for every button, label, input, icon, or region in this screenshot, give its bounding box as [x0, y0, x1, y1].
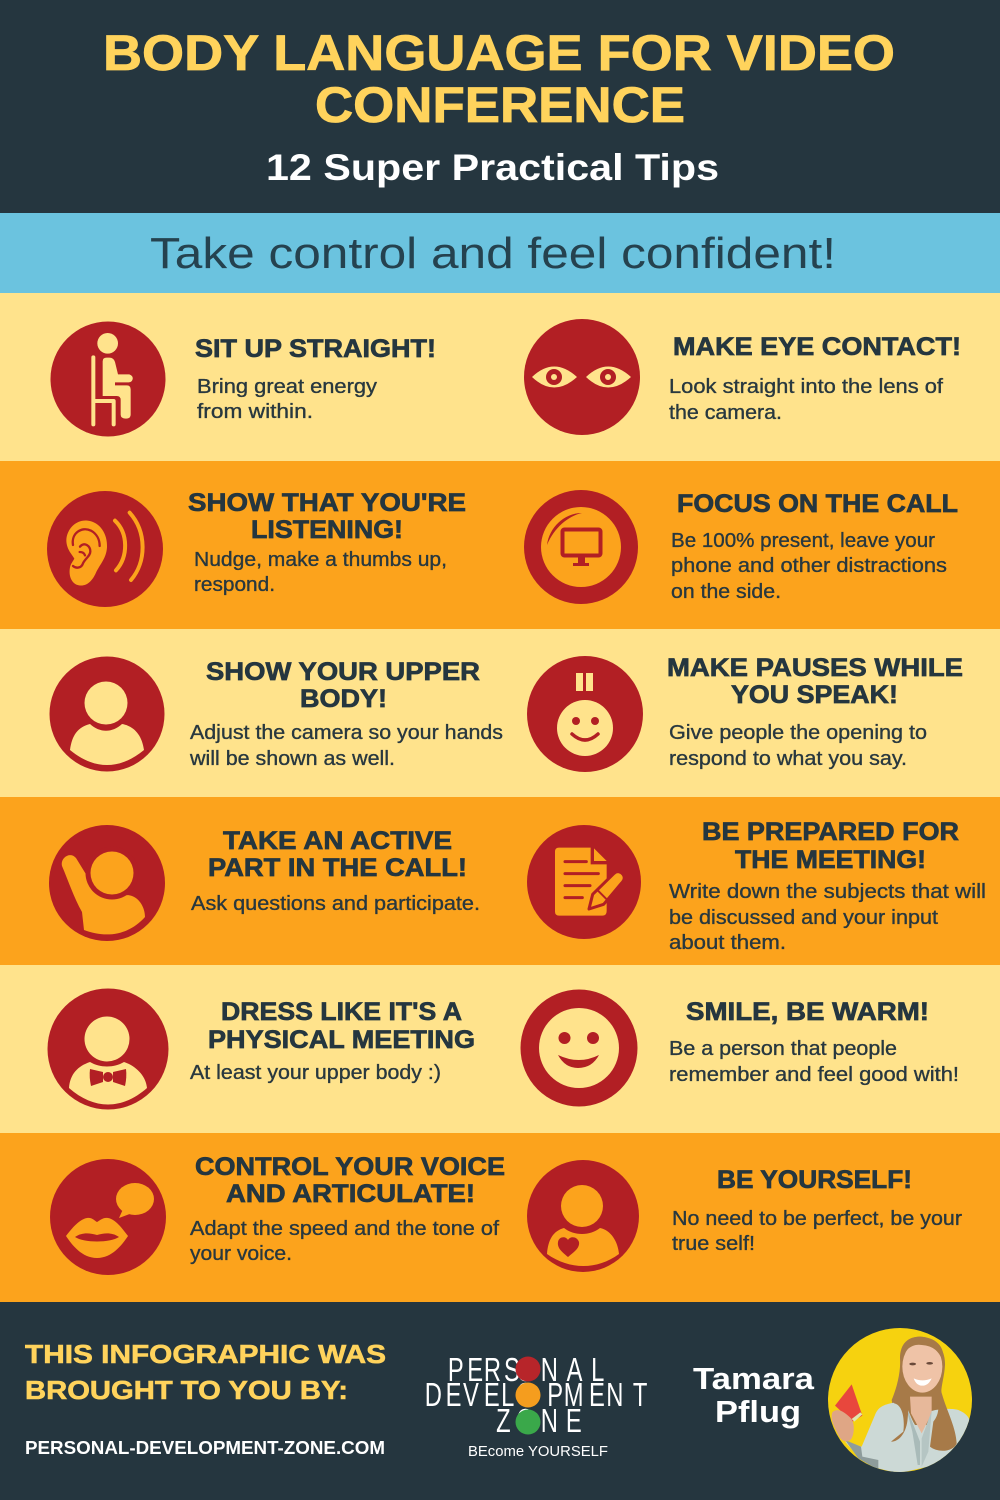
body text: Nudge, make a thumbs up, — [194, 549, 447, 571]
icon: person with heart — [527, 1160, 639, 1272]
heading: SMILE, BE WARM! — [686, 998, 929, 1026]
title: BODY LANGUAGE FOR VIDEO — [103, 25, 895, 81]
body text: Ask questions and participate. — [191, 893, 480, 915]
heading: TAKE AN ACTIVE — [223, 827, 452, 855]
heading — [208, 827, 467, 882]
heading — [667, 654, 963, 709]
heading: MAKE EYE CONTACT! — [673, 333, 961, 361]
banner: tagline — [0, 213, 1000, 293]
body text: Bring great energy — [197, 376, 377, 398]
heading — [702, 818, 959, 874]
body text: phone and other distractions — [671, 555, 947, 577]
title — [103, 25, 895, 133]
heading — [188, 489, 466, 544]
background bands — [0, 293, 1000, 1302]
credit heading — [25, 1339, 386, 1405]
author name: Tamara — [693, 1361, 815, 1396]
body text — [190, 1218, 499, 1265]
panel: make pauses while you speak — [527, 654, 963, 772]
heading: SIT UP STRAIGHT! — [195, 335, 436, 363]
body text: will be shown as well. — [189, 748, 395, 770]
panel: be yourself — [527, 1160, 962, 1272]
logo: personal development zone — [425, 1352, 647, 1460]
heading: BE YOURSELF! — [717, 1166, 912, 1194]
subtitle: 12 Super Practical Tips — [266, 147, 719, 188]
body text: Look straight into the lens of — [669, 376, 943, 398]
body text: Adjust the camera so your hands — [190, 722, 503, 744]
body text — [197, 376, 377, 423]
body text: be discussed and your input — [669, 907, 938, 929]
logo: personal development zone: PERSONAL — [448, 1352, 604, 1389]
heading: DRESS LIKE IT'S A — [221, 998, 462, 1026]
photo: author portrait — [825, 1325, 975, 1475]
body text: Write down the subjects that will — [669, 881, 986, 903]
heading: FOCUS ON THE CALL — [677, 490, 958, 518]
icon: person raising hand — [49, 825, 165, 941]
body text — [672, 1208, 962, 1255]
heading — [206, 658, 480, 713]
panel: show that you're listening — [47, 489, 466, 607]
heading: BODY! — [300, 685, 387, 713]
body text: about them. — [669, 932, 786, 954]
panel: header — [0, 0, 1000, 213]
icon: person sitting on chair — [50, 322, 166, 436]
body text: respond. — [194, 574, 275, 596]
heading: YOU SPEAK! — [731, 681, 898, 709]
credit heading: BROUGHT TO YOU BY: — [25, 1375, 348, 1405]
panel: control your voice and articulate — [50, 1153, 505, 1275]
body text: Give people the opening to — [669, 722, 927, 744]
credit heading: THIS INFOGRAPHIC WAS — [25, 1339, 386, 1369]
heading: LISTENING! — [251, 516, 403, 544]
icon: person with bow tie — [48, 988, 168, 1110]
body text — [189, 722, 503, 770]
panel: footer — [25, 1328, 972, 1472]
body text: remember and feel good with! — [669, 1064, 959, 1086]
author name — [693, 1361, 815, 1429]
body text — [669, 722, 927, 770]
heading: CONTROL YOUR VOICE — [195, 1153, 505, 1181]
panel: sit up straight — [50, 322, 436, 436]
body text: from within. — [197, 401, 313, 423]
body text: respond to what you say. — [669, 748, 907, 770]
body text: your voice. — [190, 1243, 292, 1265]
panel: take an active part in the call — [49, 825, 480, 941]
panel: focus on the call — [524, 490, 958, 604]
title: CONFERENCE — [315, 77, 685, 133]
body text: Be a person that people — [669, 1038, 897, 1060]
icon: ear with sound waves — [47, 491, 163, 607]
body text — [669, 1038, 959, 1086]
heading: AND ARTICULATE! — [226, 1180, 475, 1208]
logo: personal development zone: BEcome YOURSELF — [468, 1444, 608, 1460]
author name: Pflug — [715, 1394, 801, 1429]
panel: smile, be warm — [520, 990, 959, 1106]
heading: PHYSICAL MEETING — [208, 1026, 475, 1054]
icon: computer monitor — [524, 490, 638, 604]
icon: smiling face with pause symbol — [527, 656, 643, 772]
icon: two eyes — [524, 319, 640, 435]
icon: smiley face — [520, 990, 638, 1106]
panel: show your upper body — [50, 656, 503, 772]
panel: dress like it's a physical meeting — [48, 988, 475, 1110]
heading — [195, 1153, 505, 1208]
heading: BE PREPARED FOR — [702, 818, 959, 846]
body text — [671, 530, 947, 603]
body text — [669, 376, 943, 424]
heading: THE MEETING! — [735, 846, 926, 874]
heading — [208, 998, 475, 1054]
body text — [669, 881, 986, 954]
panel: make eye contact — [524, 319, 961, 435]
panel: be prepared for the meeting — [527, 818, 986, 954]
body text: true self! — [672, 1233, 755, 1255]
body text: Be 100% present, leave your — [671, 530, 935, 552]
heading: SHOW YOUR UPPER — [206, 658, 480, 686]
body text: At least your upper body :) — [190, 1062, 441, 1084]
heading: SHOW THAT YOU'RE — [188, 489, 466, 517]
logo: personal development zone: DEVELOPMENT — [425, 1377, 647, 1414]
banner: tagline: Take control and feel confident! — [150, 229, 836, 278]
icon: person upper body — [50, 656, 164, 772]
heading: MAKE PAUSES WHILE — [667, 654, 963, 682]
body text: Adapt the speed and the tone of — [190, 1218, 499, 1240]
website: PERSONAL-DEVELOPMENT-ZONE.COM — [25, 1438, 385, 1458]
body text: on the side. — [671, 581, 781, 603]
body text: the camera. — [669, 402, 782, 424]
heading: PART IN THE CALL! — [208, 854, 467, 882]
icon: lips and speech bubble — [50, 1159, 166, 1275]
body text — [194, 549, 447, 596]
icon: document and pencil — [527, 825, 641, 939]
body text: No need to be perfect, be your — [672, 1208, 962, 1230]
logo: personal development zone: ZONE — [496, 1403, 582, 1440]
